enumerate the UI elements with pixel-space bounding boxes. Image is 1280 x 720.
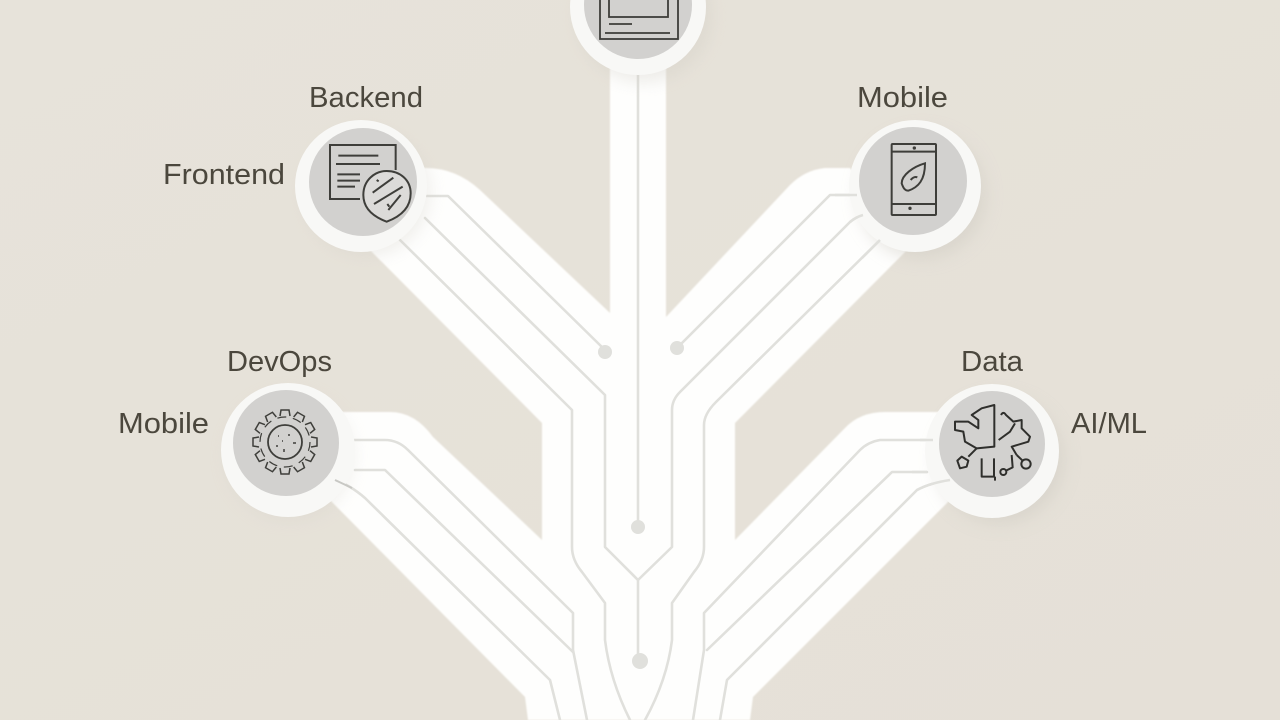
devops branch line end <box>335 480 352 488</box>
icon: gear <box>253 410 317 474</box>
node: Mobile <box>835 120 986 259</box>
node: Data / AI <box>912 384 1064 524</box>
label: Mobile (top right): Mobile <box>857 82 948 114</box>
icon: smartphone <box>892 144 936 215</box>
white branch band <box>325 40 955 720</box>
mobile branch line ends <box>835 195 880 258</box>
junction dots <box>598 341 684 669</box>
label: DevOps: DevOps <box>227 346 332 378</box>
label: Backend: Backend <box>309 82 423 114</box>
icon: document and shield <box>330 145 411 222</box>
label: Frontend: Frontend <box>163 159 285 191</box>
tree structure <box>325 40 955 720</box>
label: Data: Data <box>961 346 1024 378</box>
label: Mobile (left): Mobile <box>118 408 209 440</box>
data branch line ends <box>912 440 950 490</box>
label: AI/ML: AI/ML <box>1071 408 1147 440</box>
node: top <box>570 0 712 82</box>
icon: brain network <box>955 405 1031 481</box>
icon: monitor <box>600 0 678 39</box>
node: Backend / Frontend <box>295 120 430 256</box>
node: DevOps <box>221 383 355 520</box>
circuit lines <box>335 60 950 720</box>
